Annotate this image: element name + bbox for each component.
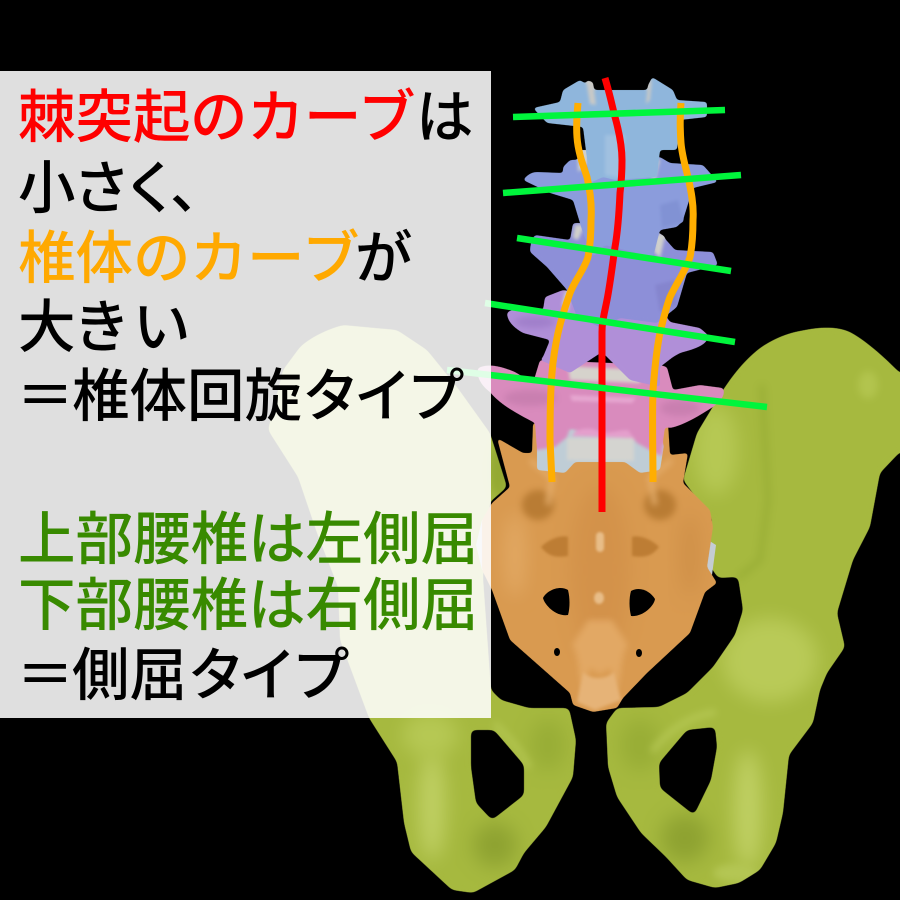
heading line: vertebral body curve: 椎体のカーブ	[18, 227, 360, 291]
text line: 大きい	[18, 296, 190, 360]
text line: rotation type: ＝椎体回旋タイプ	[16, 365, 464, 429]
illustration: pelvis and lumbar spine	[268, 77, 900, 893]
disc level lines (green)	[447, 110, 767, 407]
heading line: spinous process curve: 棘突起のカーブ	[18, 86, 416, 150]
lumbar vertebra L4	[507, 290, 708, 387]
lumbar vertebra L2	[523, 150, 718, 257]
text block: curve explanation	[16, 86, 478, 708]
lumbar vertebra L3	[530, 223, 718, 328]
heading line: spinous process curve: は	[416, 86, 474, 150]
left vertebral body curve (orange)	[550, 103, 591, 482]
text line: lateral flexion type: ＝側屈タイプ	[16, 644, 350, 708]
sacrum	[482, 423, 717, 712]
sacroiliac joint cartilage	[476, 520, 716, 575]
text line: 小さく、	[18, 157, 228, 221]
heading line: vertebral body curve: が	[355, 227, 412, 291]
lumbar vertebra L1	[533, 77, 707, 183]
text line: lower lumbar: 下部腰椎は右側屈	[18, 574, 478, 638]
lumbar vertebra L5	[478, 360, 724, 473]
right hip bone	[606, 328, 900, 888]
text line: upper lumbar: 上部腰椎は左側屈	[18, 508, 478, 572]
spinous process curve (red)	[602, 78, 622, 512]
sacral details and foramina	[541, 532, 659, 657]
panel: text background	[0, 71, 491, 718]
right vertebral body curve (orange)	[653, 103, 693, 482]
left hip bone	[268, 325, 576, 893]
